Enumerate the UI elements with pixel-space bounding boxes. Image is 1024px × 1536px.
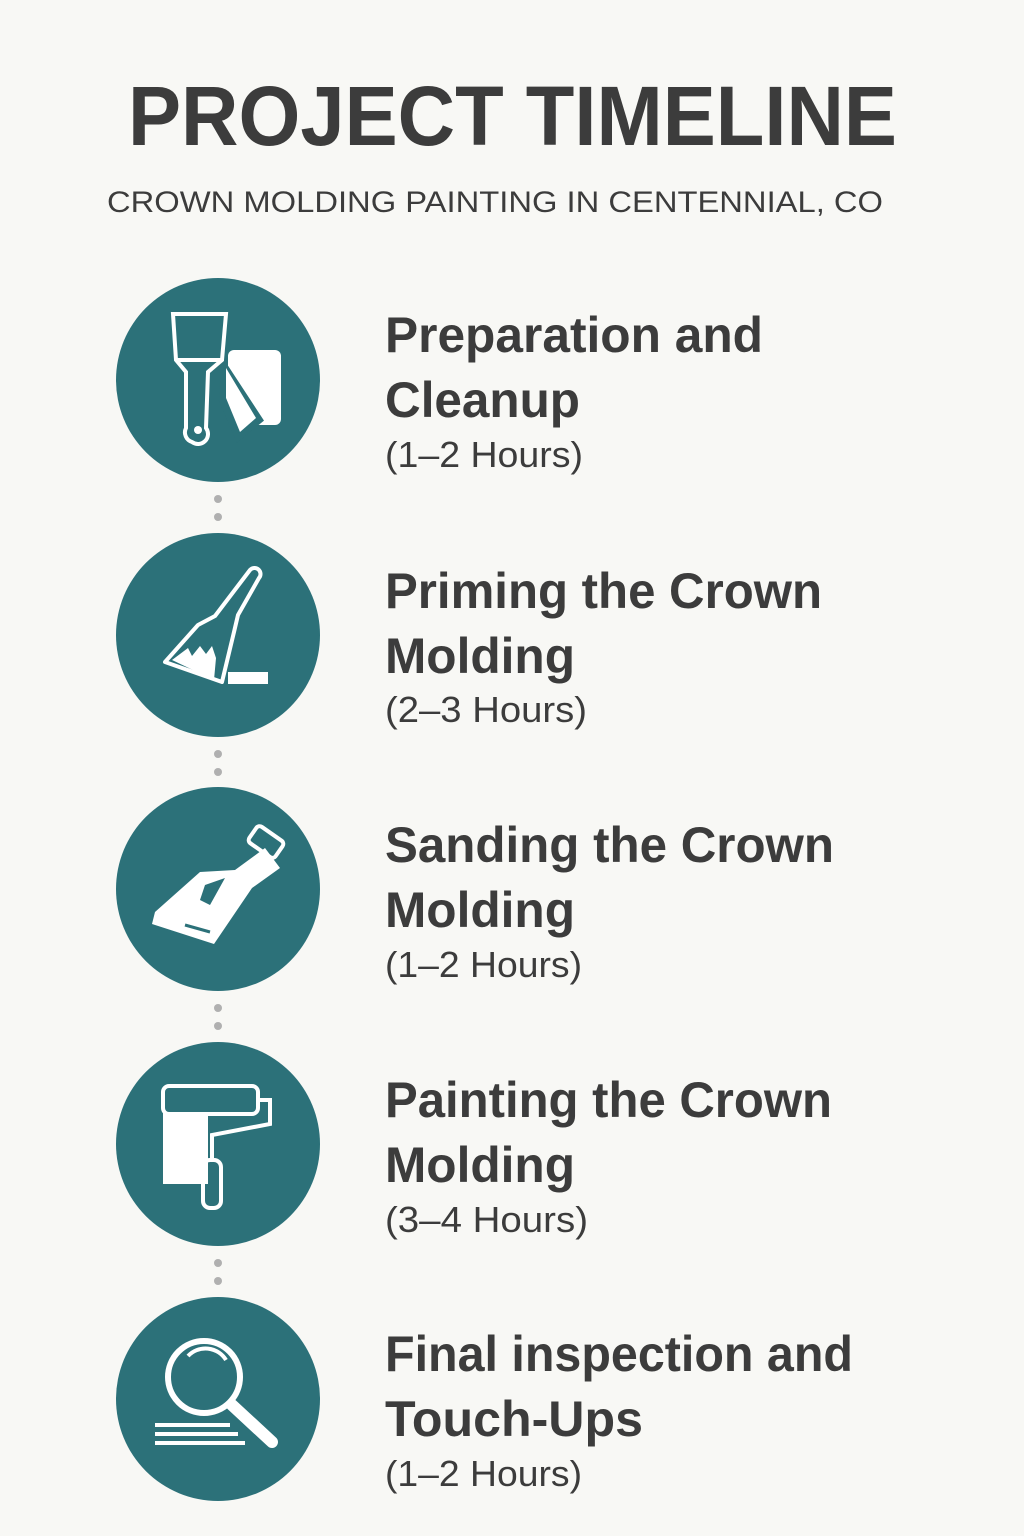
step 3: sanding: Molding [385, 882, 575, 938]
heading: Final inspection and [385, 1326, 853, 1382]
step 4: painting [116, 1042, 832, 1246]
duration: (1–2 Hours) [385, 434, 583, 475]
heading: Painting the Crown [385, 1072, 832, 1128]
duration: (3–4 Hours) [385, 1199, 588, 1240]
step 1: preparation: Cleanup [385, 372, 580, 428]
step 4: painting: Molding [385, 1137, 575, 1193]
step 2: priming: Molding [385, 628, 575, 684]
duration: (1–2 Hours) [385, 944, 582, 985]
subtitle: CROWN MOLDING PAINTING IN CENTENNIAL, CO [107, 186, 883, 219]
step 3: sanding [116, 787, 834, 991]
icon: scraper and cloth [116, 278, 320, 482]
heading: Preparation and [385, 307, 763, 363]
title: PROJECT TIMELINE [128, 69, 897, 163]
heading: Priming the Crown [385, 563, 822, 619]
step 5: inspection [116, 1297, 853, 1501]
step 2: priming [116, 533, 822, 737]
step 5: inspection: Touch-Ups [385, 1391, 643, 1447]
icon: magnifier [116, 1297, 320, 1501]
duration: (1–2 Hours) [385, 1453, 582, 1494]
heading: Sanding the Crown [385, 817, 834, 873]
icon: paint roller [116, 1042, 320, 1246]
icon: sanding block [116, 787, 320, 991]
step 1: preparation [116, 278, 763, 482]
icon: brush [116, 533, 320, 737]
duration: (2–3 Hours) [385, 689, 587, 730]
